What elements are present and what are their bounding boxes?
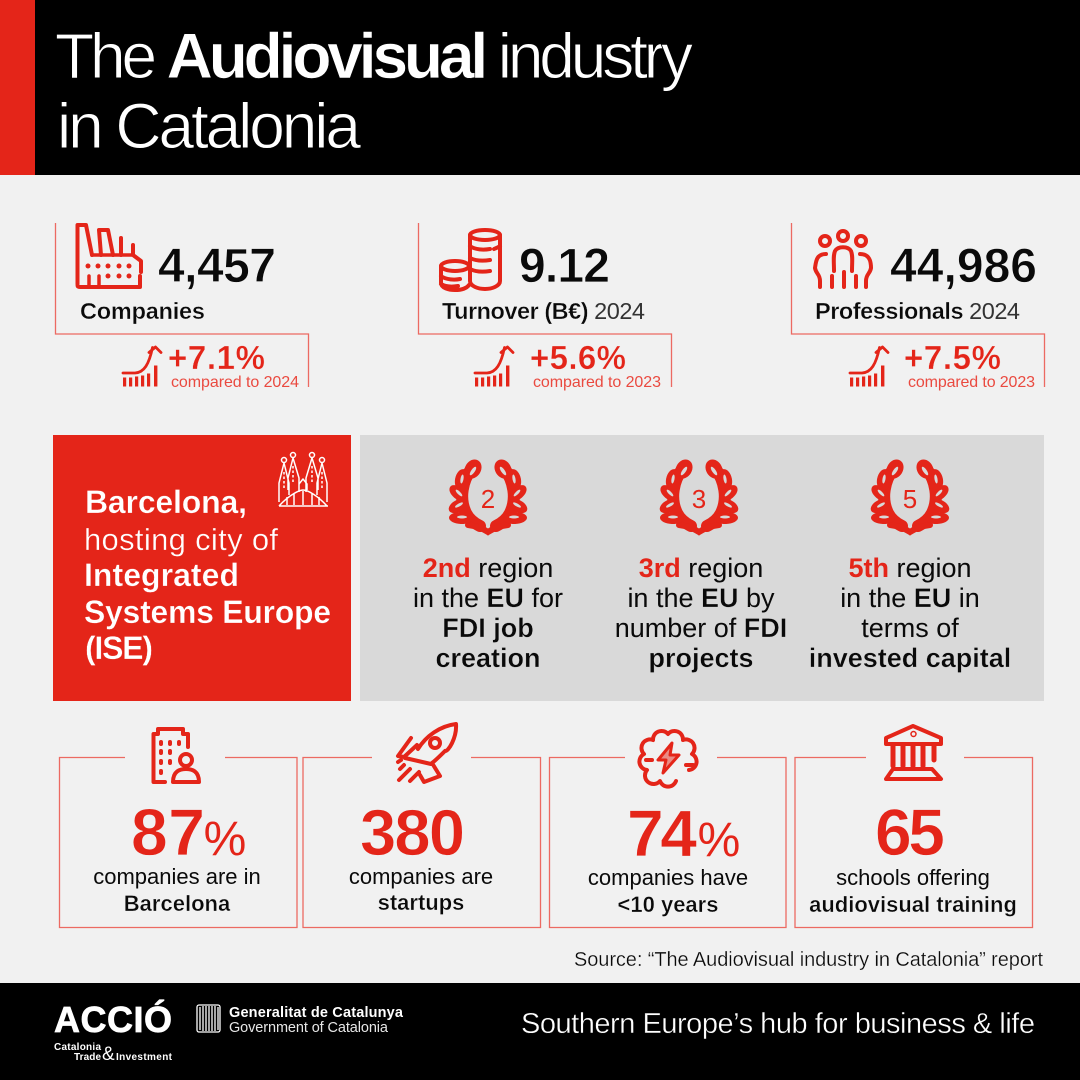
icon: building with person — [154, 729, 199, 782]
value: 74 — [627, 796, 697, 870]
tagline: Southern Europe’s hub for business & life — [521, 1008, 1035, 1040]
change: +5.6% — [530, 339, 626, 376]
ranking text: terms of — [861, 613, 959, 643]
value: 380 — [360, 796, 465, 869]
ranking 2nd — [413, 456, 563, 673]
icon: people — [815, 231, 871, 287]
footer bar — [0, 983, 1080, 1080]
icon: growth arrow — [850, 347, 888, 386]
logo: ACCIÓ: ACCIÓ — [54, 998, 172, 1040]
text: Systems Europe — [84, 594, 331, 630]
comparison note: compared to 2023 — [908, 374, 1035, 391]
icon: rocket — [398, 724, 456, 782]
ranking text: projects — [648, 643, 754, 673]
logo: Generalitat text: Generalitat de Catalunya — [229, 1005, 404, 1021]
description: schools offering — [836, 865, 990, 890]
ranking text: creation — [435, 643, 541, 673]
icon: Sagrada Familia — [279, 452, 328, 506]
panel: professionals stat — [792, 223, 1044, 391]
title: The Audiovisual industry — [55, 20, 693, 92]
ranking text: in the EU in — [840, 583, 980, 613]
panel: companies in Barcelona — [60, 729, 297, 928]
panel: startups: startups — [378, 890, 464, 915]
logo: Generalitat text — [229, 1005, 404, 1036]
panel: turnover stat — [418, 223, 672, 391]
panel: startups — [303, 724, 540, 928]
ranking text: FDI job — [442, 613, 534, 643]
description: companies have — [588, 865, 748, 890]
value: 9.12 — [519, 240, 610, 293]
red accent block — [0, 0, 35, 175]
text — [84, 484, 331, 666]
icon: factory — [78, 225, 141, 287]
ranking text — [413, 553, 563, 673]
change: +7.5% — [904, 339, 1001, 376]
header banner — [0, 0, 1080, 175]
text: (ISE) — [85, 630, 153, 666]
panel: companies in Barcelona: Barcelona — [124, 891, 231, 916]
panel: Barcelona ISE — [53, 435, 351, 701]
value: 65 — [875, 795, 945, 869]
icon: growth arrow — [475, 347, 513, 386]
ranking text: in the EU for — [413, 583, 563, 613]
source note: Source: “The Audiovisual industry in Catalonia” report — [574, 949, 1043, 971]
comparison note: compared to 2023 — [533, 374, 661, 391]
title — [55, 20, 693, 162]
label: Companies — [80, 298, 205, 324]
panel: schools: audiovisual training — [809, 892, 1017, 917]
ranking text: invested capital — [809, 643, 1011, 673]
icon: laurel 5: 5 — [903, 484, 917, 514]
value: 87 — [131, 795, 205, 869]
icon: laurel 3: 3 — [692, 484, 706, 514]
ranking text: 3rd region — [639, 553, 763, 583]
label: Turnover (B€) 2024 — [442, 298, 645, 324]
icon: coins — [441, 230, 500, 290]
panel: companies in Barcelona: % — [204, 813, 246, 866]
icon: laurel 2: 2 — [481, 484, 495, 514]
panel: EU rankings — [360, 435, 1044, 701]
panel: schools — [795, 726, 1032, 928]
change: +7.1% — [168, 339, 265, 376]
logo: ACCIÓ: & — [102, 1044, 115, 1065]
comparison note: compared to 2024 — [171, 374, 299, 391]
ranking 5th — [809, 456, 1011, 673]
panel: young companies: % — [698, 814, 740, 867]
logo: Generalitat text: Government of Catalonia — [229, 1020, 389, 1036]
icon: institution — [886, 726, 941, 779]
ranking text: 5th region — [848, 553, 972, 583]
icon: laurel 3 — [657, 456, 741, 532]
ranking text — [809, 553, 1011, 673]
panel: companies stat — [56, 223, 308, 391]
panel: young companies: <10 years — [618, 892, 718, 917]
icon: laurel 2 — [446, 456, 530, 532]
icon: brain bolt — [639, 731, 697, 787]
label: Professionals 2024 — [815, 298, 1020, 324]
value: 4,457 — [158, 240, 276, 293]
logo: ACCIÓ: Investment — [116, 1052, 173, 1063]
description: companies are in — [93, 864, 261, 889]
text: Integrated — [84, 557, 239, 593]
ranking text: in the EU by — [627, 583, 775, 613]
description: companies are — [349, 864, 493, 889]
icon: laurel 5 — [868, 456, 952, 532]
panel: young companies — [550, 731, 786, 928]
logo: ACCIÓ — [54, 998, 173, 1065]
title: in Catalonia — [57, 90, 361, 162]
logo: ACCIÓ: Trade — [74, 1052, 101, 1063]
text: hosting city of — [84, 522, 278, 557]
icon: growth arrow — [123, 347, 161, 386]
ranking text: number of FDI — [615, 613, 787, 643]
text: Barcelona, — [85, 484, 247, 520]
logo: ACCIÓ: Catalonia — [54, 1042, 101, 1053]
ranking text — [615, 553, 787, 673]
value: 44,986 — [890, 240, 1037, 293]
ranking text: 2nd region — [423, 553, 553, 583]
ranking 3rd — [615, 456, 787, 673]
logo: Generalitat crest — [197, 1005, 220, 1032]
